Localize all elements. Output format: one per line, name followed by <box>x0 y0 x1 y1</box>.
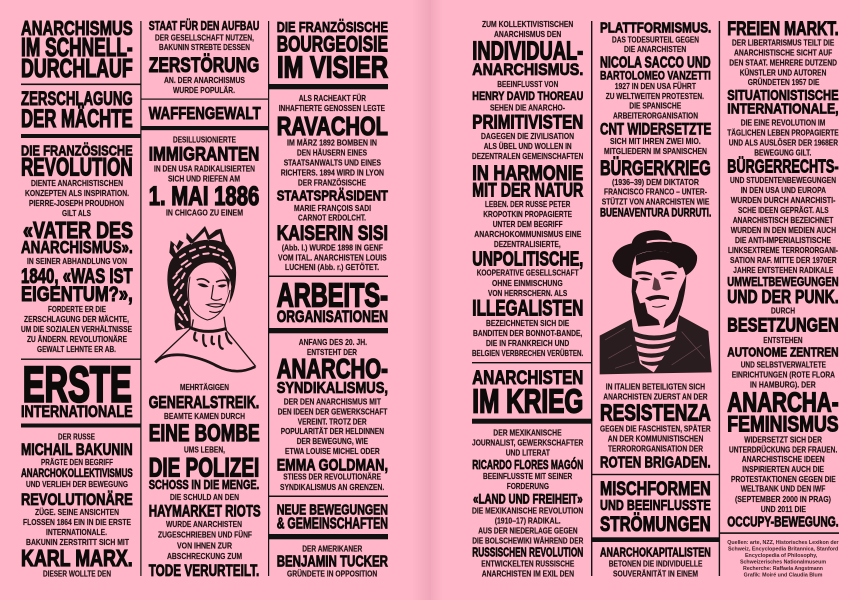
text block: Anarchosyndikalismus: ETWA LOUISE MICHEL ODER <box>285 446 380 456</box>
text block: Situationisten und Bewegungen: DURCH <box>771 306 795 316</box>
text block: Anarchosyndikalismus <box>277 337 388 492</box>
text block: Individualanarchismus: HENRY DAVID THOREAU <box>472 89 583 103</box>
text block: Ricardo Flores Magón: FORDERUNG <box>507 481 549 491</box>
heading: Waffengewalt: WAFFENGEWALT <box>149 103 261 123</box>
text block: Ricardo Flores Magón: RUSSISCHEN REVOLUTION <box>472 545 583 560</box>
text block: Individualanarchismus: IN HARMONIE <box>472 161 583 185</box>
text block: Situationisten und Bewegungen: UND 2011 DIE <box>761 504 806 514</box>
text block: Generalstreik and Haymarket Riots: MEHRTÄGIGEN <box>180 382 229 392</box>
text block: Französische Revolution: EIGENTUM?», <box>21 283 133 306</box>
text block: Individualanarchismus: OHNE EINMISCHUNG <box>492 278 563 288</box>
text block: sources and credits: Schweizerisches Nationalmuseum <box>740 560 826 566</box>
text block: Individualanarchismus: BEEINFLUSST VON <box>497 79 558 89</box>
text block: Michail Bakunin: MICHAIL BAKUNIN <box>21 440 133 459</box>
text block: Französische Revolution: DIENTE ANARCHISTISCHEN <box>31 178 123 188</box>
text block: Individualanarchismus: ANARCHOKOMMUNISMUS EINE <box>474 229 582 239</box>
text block: Generalstreik and Haymarket Riots: WURDE ANARCHISTEN <box>166 519 242 529</box>
heading: Erste Internationale: ERSTE <box>23 357 132 413</box>
text block: Individualanarchismus: DAGEGEN DIE ZIVILISATION <box>481 131 574 141</box>
text block: Situationisten und Bewegungen: SATION RAF. MITTE DER 1970ER <box>730 255 837 265</box>
text block: Situationisten und Bewegungen: GRÜNDETEN 1957 DIE <box>748 77 820 87</box>
text block: Ravachol: KAISERIN SISI <box>277 222 388 245</box>
text block: Situationisten und Bewegungen: ANARCHISTISCHE SICHT AUF <box>734 47 832 57</box>
text block: Ravachol: ALS RACHEAKT FÜR <box>299 93 366 103</box>
text block: Individualanarchismus: PRIMITIVISTEN <box>472 111 583 133</box>
text block: Benjamin Tucker: DER AMERIKANER <box>302 543 362 553</box>
text block: Anarchosyndikalismus: DER DEN ANARCHISMUS MIT <box>284 396 382 406</box>
text block: Ricardo Flores Magón: ENTWICKELTEN RUSSISCHE <box>481 559 575 569</box>
title: IM SCHNELL- <box>21 32 133 62</box>
text block: Individualanarchismus: ANARCHISMUS DEN <box>494 29 561 39</box>
heading: Anarchisten im Krieg: IM KRIEG <box>472 384 583 421</box>
text block: Plattformismus and Spanischer Bürgerkrieg: DIE SPANISCHE <box>629 101 682 111</box>
text block: Individualanarchismus: VON HERRSCHERN. ALS <box>488 288 568 298</box>
text block: Anarchosyndikalismus: ENTSTEHT DER <box>307 347 357 357</box>
heading: Erste Internationale: INTERNATIONALE <box>21 403 133 421</box>
text block: Situationisten und Bewegungen: JAHRE ENTSTEHEN RADIKALE <box>733 265 834 275</box>
text block: Zerstörung: BAKUNIN STREBTE DESSEN <box>159 42 250 52</box>
heading: Mischformen und beeinflusste Strömungen: MISCHFORMEN <box>600 478 711 500</box>
heading: Erste Internationale <box>21 357 133 421</box>
text block: Situationisten und Bewegungen: EINRICHTUNGEN (ROTE FLORA <box>732 370 835 380</box>
text block: Individualanarchismus: DIE IN FRANKREICH UND <box>486 338 569 348</box>
text block: Situationisten und Bewegungen: SCHE IDEEN GEPRÄGT. ALS <box>738 205 829 215</box>
text block: Ricardo Flores Magón: «LAND UND FREIHEIT» <box>473 490 583 506</box>
text block: Anarchosyndikalismus: DER BEWEGUNG, WIE <box>297 436 368 446</box>
text block: Situationisten und Bewegungen: (SEPTEMBER 2000 IN PRAG) <box>735 494 831 504</box>
text block: Zerstörung: WURDE POPULÄR. <box>173 85 235 95</box>
text block: Immigranten <box>149 135 259 218</box>
panel: column 6 <box>727 18 839 579</box>
text block: Ravachol: CARNOT ERDOLCHT. <box>298 213 366 223</box>
text block: sources and credits: Recherche: Raffaela Angstmann <box>743 566 823 572</box>
text block: Individualanarchismus: SEHEN DIE ANARCHO- <box>490 102 565 112</box>
text block: Französische Revolution: 1840, «WAS IST <box>21 265 133 288</box>
text block: Ricardo Flores Magón: RICARDO FLORES MAGÓN <box>472 457 583 472</box>
panel: column 1 <box>21 18 133 579</box>
text block: Situationisten und Bewegungen: DER LIBERTARISMUS TEILT DIE <box>732 37 835 47</box>
text block: sources and credits: Grafik: Moiré und Claudia Blum <box>744 573 823 579</box>
text block: Anarchosyndikalismus: SYNDIKALISMUS AN GRENZEN. <box>280 482 384 492</box>
text block: Individualanarchismus: BEZEICHNETEN SICH DIE <box>486 318 570 328</box>
text block: sources and credits: Schweiz, Encyclopedia Britannica, Stanford <box>728 547 838 553</box>
title <box>21 18 133 83</box>
text block: Resistenza: ROTEN BRIGADEN. <box>600 454 711 471</box>
heading: Zerschlagung der Mächte: ZERSCHLAGUNG <box>21 89 133 110</box>
text block: Situationisten und Bewegungen: WURDEN DURCH ANARCHISTI- <box>731 195 836 205</box>
text block: Generalstreik and Haymarket Riots: SCHOSS IN DIE MENGE. <box>149 477 259 492</box>
text block: Resistenza: AN DER KOMMUNISTISCHEN <box>608 434 703 444</box>
text block: Michail Bakunin: PRÄGTE DEN BEGRIFF <box>41 457 113 467</box>
heading: Neue Bewegungen und Gemeinschaften: NEUE BEWEGUNGEN <box>277 501 388 518</box>
text block: Michail Bakunin <box>21 432 133 579</box>
text block: Individualanarchismus: KOOPERATIVE GESELLSCHAFT <box>477 268 579 278</box>
text block: Zerstörung <box>149 18 259 95</box>
text block: Ricardo Flores Magón: UND LITERAT <box>506 448 551 458</box>
text block: Situationisten und Bewegungen: IN DEN USA UND EUROPA <box>741 185 826 195</box>
text block: Plattformismus and Spanischer Bürgerkrieg: FRANCISCO FRANCO – UNTER- <box>604 187 707 197</box>
heading: Die französische Bourgeoisie im Visier: DIE FRANZÖSISCHE <box>277 19 388 36</box>
heading: Anarchisten im Krieg: ANARCHISTEN <box>472 368 583 389</box>
text block: Individualanarchismus <box>472 19 583 358</box>
text block: Benjamin Tucker: BENJAMIN TUCKER <box>277 554 388 571</box>
text block: Benjamin Tucker: GRÜNDETE IN OPPOSITION <box>287 569 377 579</box>
text block: Französische Revolution: PIERRE-JOSEPH PROUDHON <box>29 198 124 208</box>
heading: Arbeitsorganisationen: ARBEITS- <box>277 276 388 314</box>
text block: Anarchosyndikalismus: EMMA GOLDMAN, <box>277 456 388 475</box>
text block: Michail Bakunin: DIESER WOLLTE DEN <box>43 569 111 579</box>
text block: Situationisten und Bewegungen: KÜNSTLER UND AUTOREN <box>740 67 826 77</box>
text block: Französische Revolution: ZERSCHLAGUNG DER MÄCHTE, <box>24 314 129 324</box>
text block: Situationisten und Bewegungen: DIE ANTI-IMPERIALISTISCHE <box>735 235 831 245</box>
heading: Arbeitsorganisationen: ORGANISATIONEN <box>277 307 388 326</box>
text block: Michail Bakunin: REVOLUTIONÄRE <box>21 490 133 509</box>
text block: Generalstreik and Haymarket Riots: EINE BOMBE <box>149 420 260 447</box>
text block: Anarchokapitalisten: SOUVERÄNITÄT IN EINEM <box>613 569 698 579</box>
text block: sources and credits: Quellen: arte, NZZ, Historisches Lexikon der <box>727 540 839 546</box>
heading: Die französische Bourgeoisie im Visier: BOURGEOISIE <box>277 32 388 57</box>
text block: Immigranten: DESILLUSIONIERTE <box>173 135 236 145</box>
text block: Französische Revolution: UM DIE SOZIALEN VERHÄLTNISSE <box>21 324 132 334</box>
text block: Ricardo Flores Magón: AUS DER NIEDERLAGE GEGEN <box>478 526 578 536</box>
text block: Zerstörung: STAAT FÜR DEN AUFBAU <box>149 18 259 33</box>
text block: Immigranten: IN CHICAGO ZU EINEM <box>166 208 243 218</box>
heading: Arbeitsorganisationen <box>277 276 388 326</box>
text block: Generalstreik and Haymarket Riots: TODE VERURTEILT. <box>149 561 259 580</box>
text block: Französische Revolution: FORDERTE ER DIE <box>48 304 106 314</box>
text block: Anarchosyndikalismus: ANARCHO- <box>277 353 388 384</box>
text block: Situationisten und Bewegungen: BEWEGUNG GILT. <box>754 147 811 157</box>
text block: Individualanarchismus: ALS ÜBEL UND WOLLEN IN <box>484 141 572 151</box>
text block: Generalstreik and Haymarket Riots <box>149 382 261 580</box>
text block: Plattformismus and Spanischer Bürgerkrieg: 1927 IN DEN USA FÜHRT <box>615 81 697 91</box>
text block: Individualanarchismus: ANARCHISMUS. <box>472 60 583 79</box>
text block: Ravachol: MARIE FRANÇOIS SADI <box>294 203 371 213</box>
text block: Anarchosyndikalismus: DEN IDEEN DER GEWERKSCHAFT <box>278 406 388 416</box>
text block: Immigranten: IN DEN USA RADIKALISIERTEN <box>154 164 255 174</box>
text block: Situationisten und Bewegungen: ENTSTEHEN <box>763 335 803 345</box>
text block: Anarchosyndikalismus: VEREINT. TROTZ DER <box>298 416 367 426</box>
text block: Resistenza: TERRORORGANISATION DER <box>608 443 703 453</box>
text block: Plattformismus and Spanischer Bürgerkrieg: DIE ANARCHISTEN <box>624 44 686 54</box>
text block: Situationisten und Bewegungen: WIDERSETZT SICH DER <box>744 434 822 444</box>
text block: Französische Revolution: ZU ÄNDERN. REVOLUTIONÄRE <box>27 334 127 344</box>
text block: Ricardo Flores Magón <box>472 428 583 579</box>
text block: Michail Bakunin: INTERNATIONALE. <box>46 527 107 537</box>
text block: Ravachol: IM MÄRZ 1892 BOMBEN IN <box>287 138 377 148</box>
heading: Mischformen und beeinflusste Strömungen: UND BEEINFLUSSTE <box>600 497 711 514</box>
text block: Situationisten und Bewegungen: WELTBANK UND DEN IWF <box>741 484 825 494</box>
text block: Ravachol: (Abb. l.) WURDE 1898 IN GENF <box>282 242 383 252</box>
text block: Individualanarchismus: UNPOLITISCHE, <box>472 248 583 271</box>
heading: Anarchisten im Krieg <box>472 368 583 421</box>
text block: Ravachol: DER FRANZÖSISCHE <box>298 177 366 187</box>
text block: Plattformismus and Spanischer Bürgerkrieg: DAS TODESURTEIL GEGEN <box>612 34 699 44</box>
text block: Ravachol: RICHTERS. 1894 WIRD IN LYON <box>281 167 384 177</box>
text block: Situationisten und Bewegungen: ANARCHISTISCHE IDEEN <box>742 454 825 464</box>
text block: Michail Bakunin: FLOSSEN 1864 EIN IN DIE ERSTE <box>23 517 131 527</box>
text block: Individualanarchismus: DEZENTRALEN GEMEINSCHAFTEN <box>472 151 583 161</box>
text block: Französische Revolution: «VATER DES <box>23 217 133 243</box>
heading: Neue Bewegungen und Gemeinschaften: & GEMEINSCHAFTEN <box>277 515 388 532</box>
heading: Zerschlagung der Mächte <box>21 89 133 133</box>
text block: Französische Revolution: KONZEPTEN ALS INSPIRATION. <box>25 188 129 198</box>
text block: Resistenza <box>600 382 711 471</box>
text block: Resistenza: GEGEN DIE FASCHISTEN, SPÄTER <box>600 424 711 434</box>
text block: Anarchosyndikalismus: POPULARITÄT DER HELDINNEN <box>281 426 384 436</box>
heading: Die französische Bourgeoisie im Visier <box>277 19 388 85</box>
text block: Ravachol: VOM ITAL. ANARCHISTEN LOUIS <box>278 252 387 262</box>
text block: Generalstreik and Haymarket Riots: GENERALSTREIK. <box>149 392 259 412</box>
heading: Die französische Bourgeoisie im Visier: IM VISIER <box>277 50 388 85</box>
text block: Resistenza: ANARCHISTEN ZUERST AN DER <box>603 392 708 402</box>
title: ANARCHISMUS <box>21 18 133 40</box>
text block: Zerstörung: DER GESELLSCHAFT NUTZEN, <box>155 32 254 42</box>
text block: Generalstreik and Haymarket Riots: ABSCHRECKUNG ZUM <box>167 551 242 561</box>
text block: Generalstreik and Haymarket Riots: ZUGESCHRIEBEN UND FÜNF <box>158 530 252 540</box>
text block: Generalstreik and Haymarket Riots: HAYMARKET RIOTS <box>149 503 261 521</box>
text block: Situationisten und Bewegungen: ANARCHISTISCH BEZEICHNET <box>733 215 834 225</box>
text block: Plattformismus and Spanischer Bürgerkrieg: SICH MIT IHREN ZWEI MIO. <box>610 136 701 146</box>
text block: Individualanarchismus: ILLEGALISTEN <box>472 296 583 321</box>
text block: Ricardo Flores Magón: DER MEXIKANISCHE <box>493 428 562 438</box>
text block: Plattformismus and Spanischer Bürgerkrieg: BÜRGERKRIEG <box>600 157 711 180</box>
text block: Situationisten und Bewegungen: INTERNATIONALE, <box>727 100 839 118</box>
text block: Resistenza: IN ITALIEN BETEILIGTEN SICH <box>606 382 705 392</box>
text block: Generalstreik and Haymarket Riots: DIE POLIZEI <box>149 453 259 483</box>
text block: Resistenza: RESISTENZA <box>600 400 711 426</box>
text block: Immigranten: SICH UND RIEFEN AM <box>168 174 240 184</box>
text block: Situationisten und Bewegungen: UND SELBSTVERWALTETE <box>741 360 826 370</box>
heading: Mischformen und beeinflusste Strömungen <box>600 478 711 536</box>
panel: column 3 <box>277 19 388 579</box>
text block: Französische Revolution: GEWALT LEHNTE ER AB. <box>37 344 116 354</box>
text block: Ravachol: STAATSPRÄSIDENT <box>277 188 388 205</box>
text block: Situationisten und Bewegungen <box>727 18 839 531</box>
text block: Anarchosyndikalismus: STIESS DER REVOLUTIONÄRE <box>283 472 381 482</box>
text block: Individualanarchismus: MIT DER NATUR <box>472 180 583 202</box>
text block: Immigranten: 1. MAI 1886 <box>149 181 259 211</box>
text block: Ravachol: RAVACHOL <box>277 111 388 141</box>
text block: Situationisten und Bewegungen: DIE EINE REVOLUTION IM <box>741 117 825 127</box>
text block: Individualanarchismus: BANDITEN DER BONNOT-BANDE, <box>473 328 582 338</box>
text block: Individualanarchismus: DEZENTRALISIERTE, <box>494 239 561 249</box>
text block: Individualanarchismus: UNTER DEM BEGRIFF <box>493 219 563 229</box>
text block: Anarchokapitalisten: ANARCHOKAPITALISTEN <box>600 546 711 560</box>
text block: Plattformismus and Spanischer Bürgerkrieg: STÜTZT VON ANARCHISTEN WIE <box>602 197 710 207</box>
text block: Plattformismus and Spanischer Bürgerkrieg: ARBEITERORGANISATION <box>613 110 698 120</box>
text block: Anarchosyndikalismus: SYNDIKALISMUS, <box>277 380 388 397</box>
heading: Mischformen und beeinflusste Strömungen: STRÖMUNGEN <box>600 513 711 536</box>
text block: Ricardo Flores Magón: DIE BOLSCHEWIKI WÄHREND DER <box>472 535 583 545</box>
text block: Ricardo Flores Magón: DIE MEXIKANISCHE REVOLUTION <box>472 505 583 515</box>
text block: Anarchokapitalisten: BETONEN DIE INDIVIDUELLE <box>609 559 703 569</box>
text block: Zerstörung: ZERSTÖRUNG <box>149 52 259 77</box>
text block: Plattformismus and Spanischer Bürgerkrieg: PLATTFORMISMUS. <box>600 19 711 36</box>
text block: Ravachol: INHAFTIERTE GENOSSEN LEGTE <box>279 103 385 113</box>
text block: Individualanarchismus: KROPOTKIN PROPAGIERTE <box>483 209 572 219</box>
heading: Zerschlagung der Mächte: DER MÄCHTE <box>21 105 133 133</box>
text block: Plattformismus and Spanischer Bürgerkrieg: (1936–39) DEM DIKTATOR <box>612 177 699 187</box>
text block: Michail Bakunin: ZÜGE. SEINE ANSICHTEN <box>35 507 119 517</box>
panel: column 2 <box>149 18 261 580</box>
text block: Französische Revolution: GILT ALS <box>62 208 91 218</box>
text block: Individualanarchismus: INDIVIDUAL- <box>472 37 583 65</box>
text block: Situationisten und Bewegungen: INSPIRIERTEN AUCH DIE <box>742 464 824 474</box>
text block: Individualanarchismus: LEBEN. DER RUSSE PETER <box>485 199 570 209</box>
text block: Französische Revolution <box>21 142 133 354</box>
text block: Michail Bakunin: BAKUNIN ZERSTRITT SICH MIT <box>26 537 130 547</box>
text block: Michail Bakunin: UND VERLIEH DER BEWEGUNG <box>26 479 128 489</box>
text block: Immigranten: IMMIGRANTEN <box>149 145 259 166</box>
text block: Situationisten und Bewegungen: WURDEN IN DEN MEDIEN AUCH <box>731 225 836 235</box>
panel: column 4 <box>472 19 583 579</box>
text block: Generalstreik and Haymarket Riots: UMS LEBEN, <box>184 445 225 455</box>
text block: Ricardo Flores Magón: BEEINFLUSSTE MIT SEINER <box>483 471 572 481</box>
text block: Anarchokapitalisten <box>600 546 711 579</box>
text block: Plattformismus and Spanischer Bürgerkrieg: MITGLIEDERN IM SPANISCHEN <box>604 146 707 156</box>
title: DURCHLAUF <box>21 53 133 83</box>
text block: Individualanarchismus: ZUM KOLLEKTIVISTISCHEN <box>482 19 573 29</box>
text block: sources and credits <box>727 540 839 579</box>
text block: Ricardo Flores Magón: (1910–17) RADIKAL. <box>495 515 561 525</box>
text block: Plattformismus and Spanischer Bürgerkrieg: CNT WIDERSETZTE <box>600 121 711 139</box>
text block: Französische Revolution: IN SEINER ABHANDLUNG VON <box>27 256 127 266</box>
text block: Ravachol: LUCHENI (Abb. r.) GETÖTET. <box>285 262 379 272</box>
heading: Neue Bewegungen und Gemeinschaften <box>277 501 388 532</box>
text block: Plattformismus and Spanischer Bürgerkrieg: ZU WELTWEITEN PROTESTEN. <box>606 91 704 101</box>
text block: Französische Revolution: DIE FRANZÖSISCHE <box>21 142 133 160</box>
text block: Anarchosyndikalismus: ANFANG DES 20. JH. <box>299 337 367 347</box>
text block: Plattformismus and Spanischer Bürgerkrieg: BUENAVENTURA DURRUTI. <box>600 206 711 220</box>
text block: Französische Revolution: ANARCHISMUS». <box>21 237 133 257</box>
text block: Ricardo Flores Magón: JOURNALIST, GEWERKSCHAFTER <box>472 438 583 448</box>
text block: Ricardo Flores Magón: ANARCHISTEN IM EXIL DEN <box>482 569 574 579</box>
text block: Französische Revolution: REVOLUTION <box>21 154 133 182</box>
text block: Situationisten und Bewegungen: IN HAMBURG). DER <box>750 380 816 390</box>
text block: Plattformismus and Spanischer Bürgerkrieg <box>600 19 711 220</box>
text block: Michail Bakunin: ANARCHOKOLLEKTIVISMUS <box>21 468 133 480</box>
text block: Generalstreik and Haymarket Riots: DIE SCHULD AN DEN <box>170 492 239 502</box>
text block: Zerstörung: AN. DER ANARCHISMUS <box>164 75 245 85</box>
text block: Benjamin Tucker <box>277 543 388 579</box>
text block: Plattformismus and Spanischer Bürgerkrieg: BARTOLOMEO VANZETTI <box>600 68 711 82</box>
icon: portrait of Buenaventura Durruti <box>600 230 712 374</box>
text block: Generalstreik and Haymarket Riots: VON IHNEN ZUR <box>177 541 232 551</box>
text block: Michail Bakunin: DER RUSSE <box>58 432 95 442</box>
text block: Plattformismus and Spanischer Bürgerkrieg: NICOLA SACCO UND <box>600 55 711 72</box>
text block: Ravachol: STAATSANWALTS UND EINES <box>284 157 381 167</box>
text block: Generalstreik and Haymarket Riots: BEAMTE KAMEN DURCH <box>164 411 245 421</box>
panel: column 5 <box>600 19 712 579</box>
text block: Ravachol <box>277 93 388 272</box>
text block: Michail Bakunin: KARL MARX. <box>21 545 133 571</box>
text block: Individualanarchismus: BELGIEN VERBRECHEN VERÜBTEN. <box>472 348 583 358</box>
text block: Ravachol: DEN HÄUSERN EINES <box>297 147 367 157</box>
text block: sources and credits: Encyclopedia of Philosophy, <box>745 553 818 559</box>
icon: portrait of Kaiserin Sisi <box>155 226 255 371</box>
